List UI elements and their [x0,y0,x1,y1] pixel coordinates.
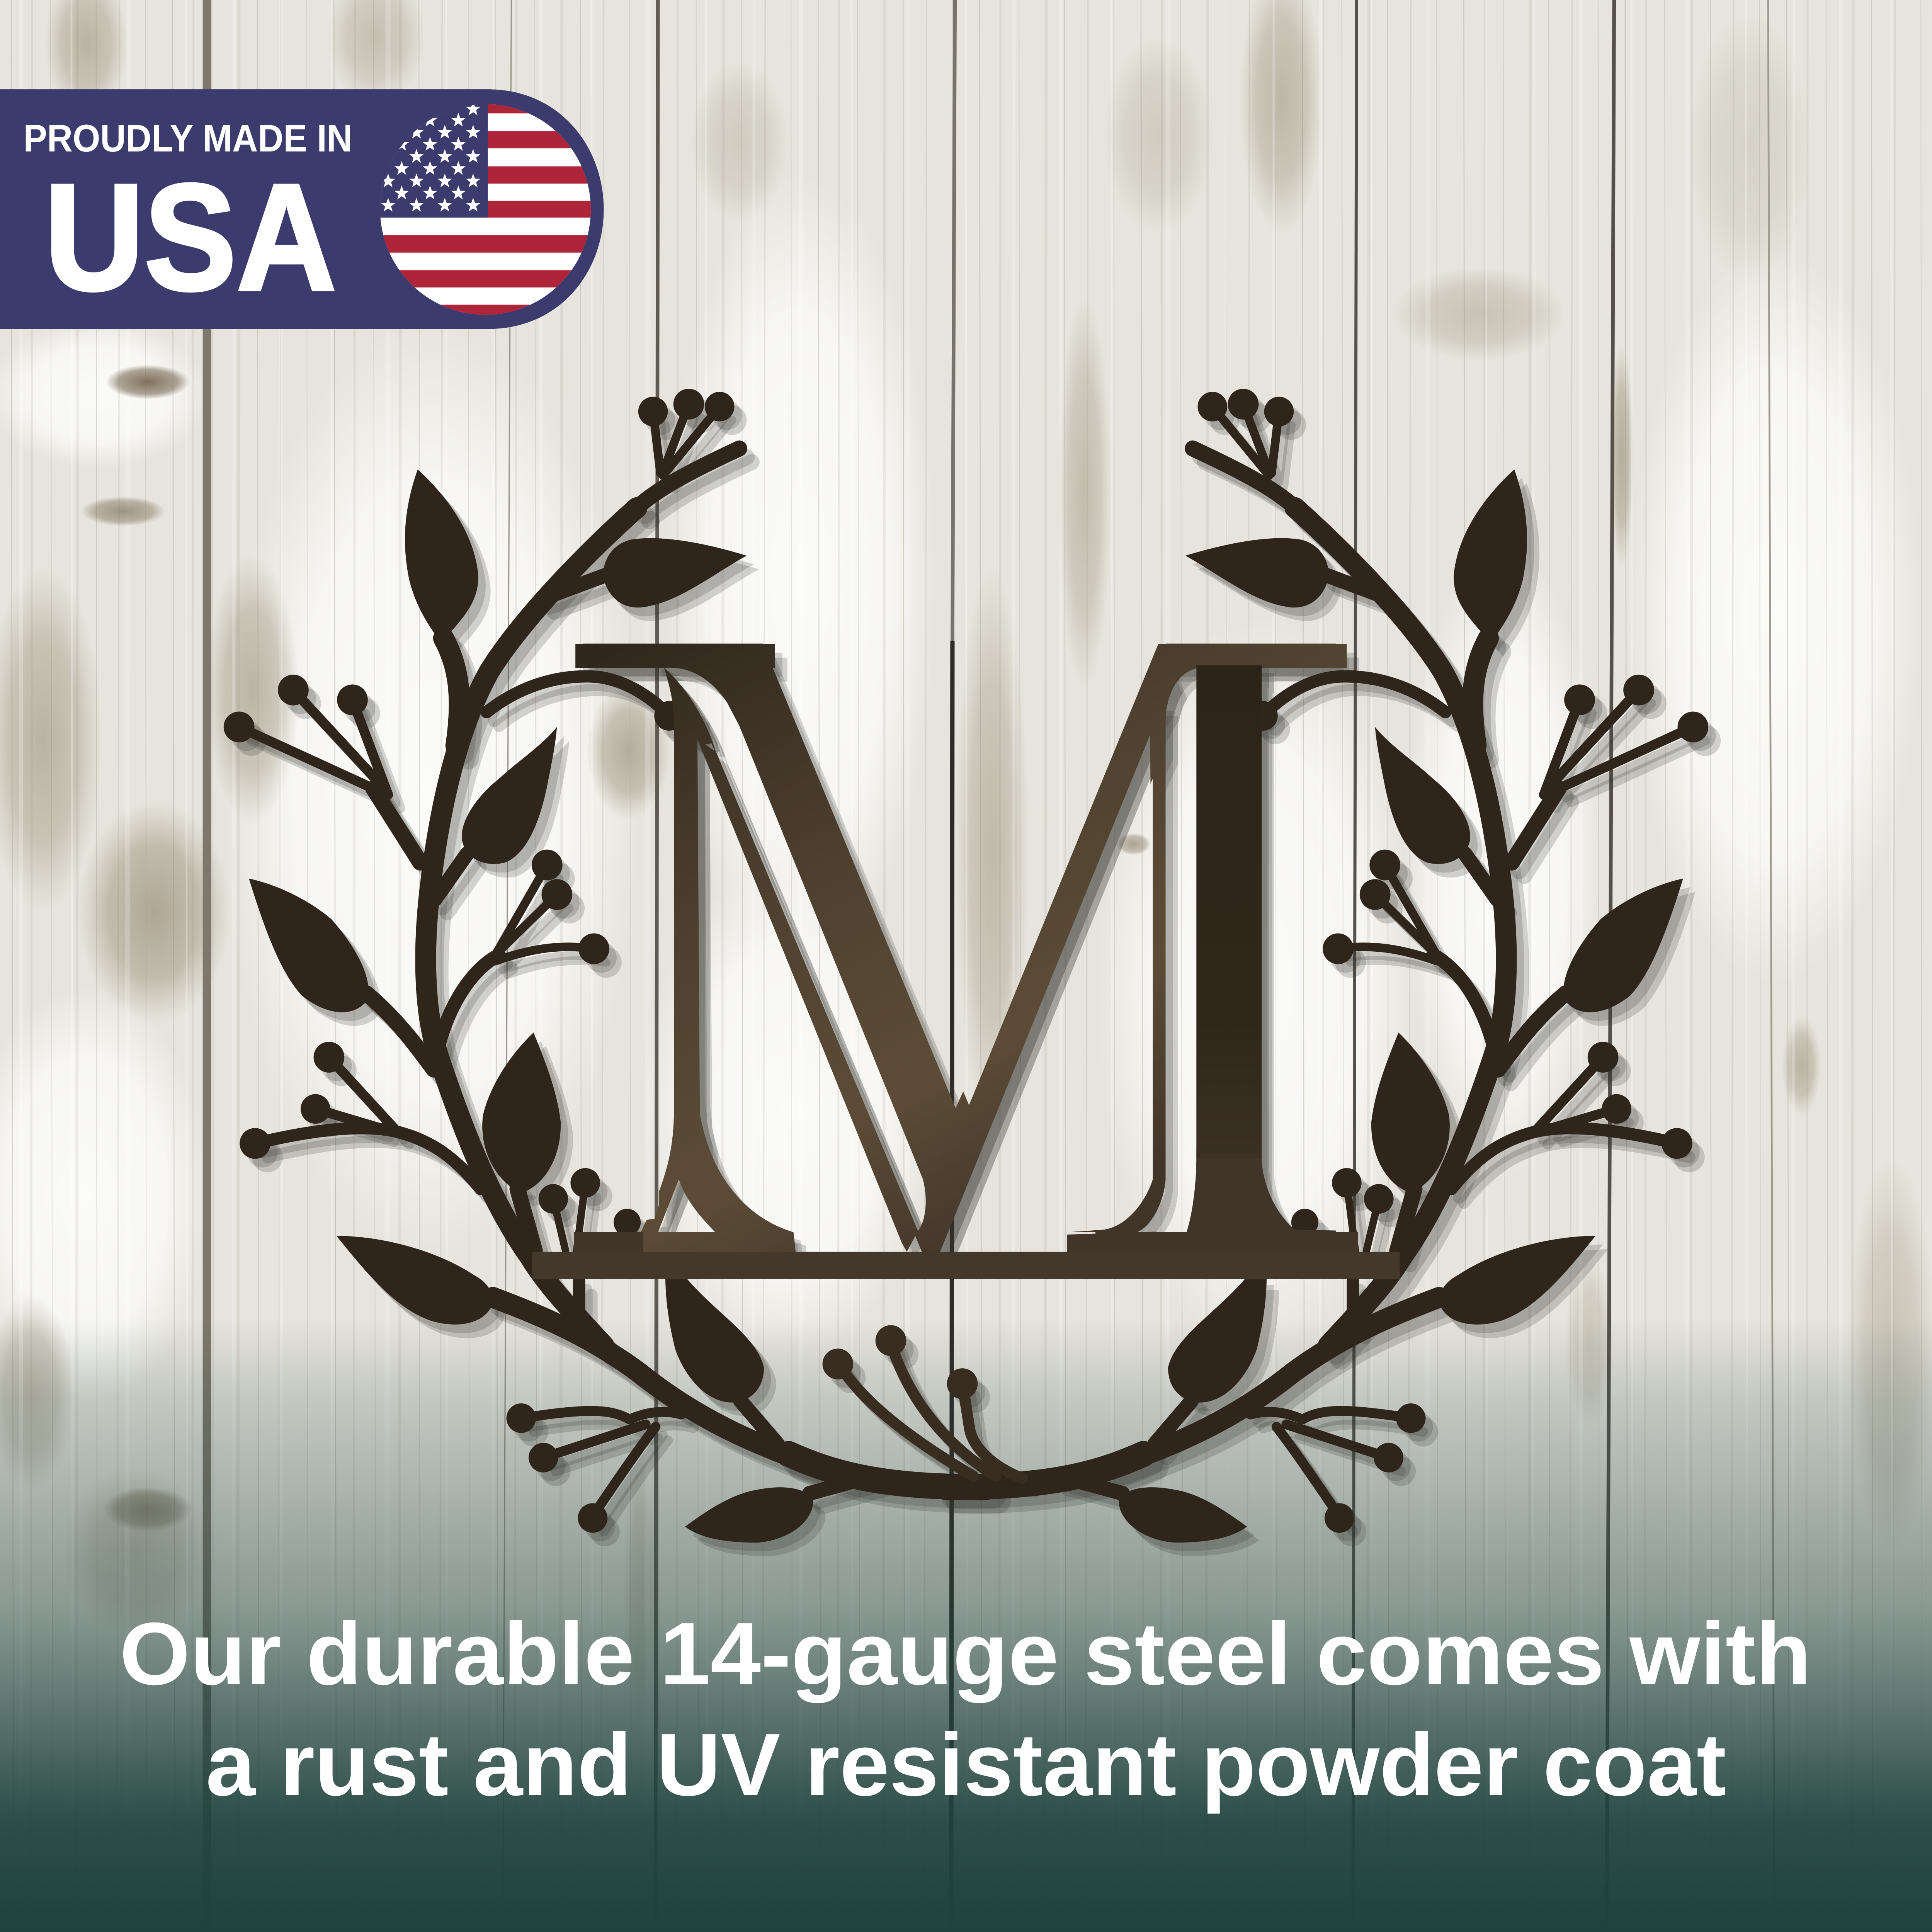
raised collar right [1289,1232,1358,1254]
icon: american flag [379,102,592,316]
wreath left half [224,389,986,1543]
caption line 1: Our durable 14-gauge steel comes with [119,1604,1811,1703]
centre berry sprig [823,1325,1023,1479]
badge small heading: PROUDLY MADE IN [24,117,352,160]
white painted areas [0,172,1922,1405]
badge large heading: USA [44,153,337,322]
badge shape [0,89,604,329]
caption [119,1604,1811,1814]
caption line 2: a rust and UV resistant powder coat [206,1715,1726,1814]
monogram letter M [575,644,1347,1252]
monogram letter M: M [557,423,1363,1456]
wreath right half [946,389,1708,1543]
right stem of the letter, darker [1196,665,1262,1158]
USA badge [0,89,604,329]
teal bottom fade [0,1318,1932,1932]
wreath and letter shadow [231,397,1721,1556]
raised collar left [574,1232,643,1254]
base bar [532,1252,1400,1279]
wreath monogram sign [224,389,1708,1543]
chipped paint [81,365,1151,1532]
